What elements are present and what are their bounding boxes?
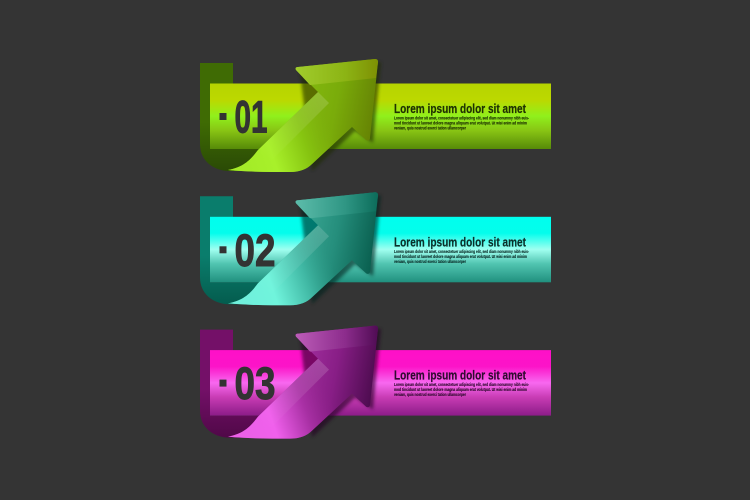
back tab [200, 196, 264, 304]
body text [394, 249, 529, 264]
bullet [220, 113, 226, 120]
bullet [220, 380, 226, 387]
arrow [228, 59, 378, 172]
heading: Lorem ipsum dolor sit amet [394, 369, 527, 383]
body text: veniam, quis nostrud exerci tation ullamcorper [394, 126, 466, 130]
arrow shadow [300, 62, 381, 171]
panel: step 03 [200, 326, 551, 439]
number: 03 [234, 358, 276, 409]
body text: mod tincidunt ut laoreet dolore magna aliquam erat volutpat. Ut wisi enim ad minim [394, 120, 527, 126]
banner bar [210, 84, 551, 149]
arrow [228, 192, 378, 305]
body text: veniam, quis nostrud exerci tation ullamcorper [394, 259, 466, 264]
body text: Lorem ipsum dolor sit amet, consectetuer adipiscing elit, sed diam nonummy nibh euis- [394, 116, 529, 120]
body text: mod tincidunt ut laoreet dolore magna aliquam erat volutpat. Ut wisi enim ad minim [394, 254, 527, 259]
banner bar [210, 350, 551, 416]
bullet [220, 246, 226, 253]
panel: step 02 [200, 192, 551, 305]
banner bar [210, 217, 551, 282]
body text: veniam, quis nostrud exerci tation ullamcorper [394, 392, 466, 397]
back tab [200, 63, 264, 171]
heading: Lorem ipsum dolor sit amet [394, 102, 527, 116]
number: 02 [234, 225, 276, 276]
arrow [228, 326, 378, 439]
back tab [200, 330, 264, 438]
body text [394, 382, 529, 397]
body text: mod tincidunt ut laoreet dolore magna aliquam erat volutpat. Ut wisi enim ad minim [394, 387, 527, 392]
body text: Lorem ipsum dolor sit amet, consectetuer adipiscing elit, sed diam nonummy nibh euis- [394, 249, 529, 254]
arrow shadow [300, 195, 381, 304]
body text [394, 116, 529, 130]
body text: Lorem ipsum dolor sit amet, consectetuer adipiscing elit, sed diam nonummy nibh euis- [394, 382, 529, 387]
number: 01 [234, 92, 268, 142]
heading: Lorem ipsum dolor sit amet [394, 235, 527, 249]
arrow shadow [300, 329, 381, 438]
panel: step 01 [200, 59, 551, 172]
